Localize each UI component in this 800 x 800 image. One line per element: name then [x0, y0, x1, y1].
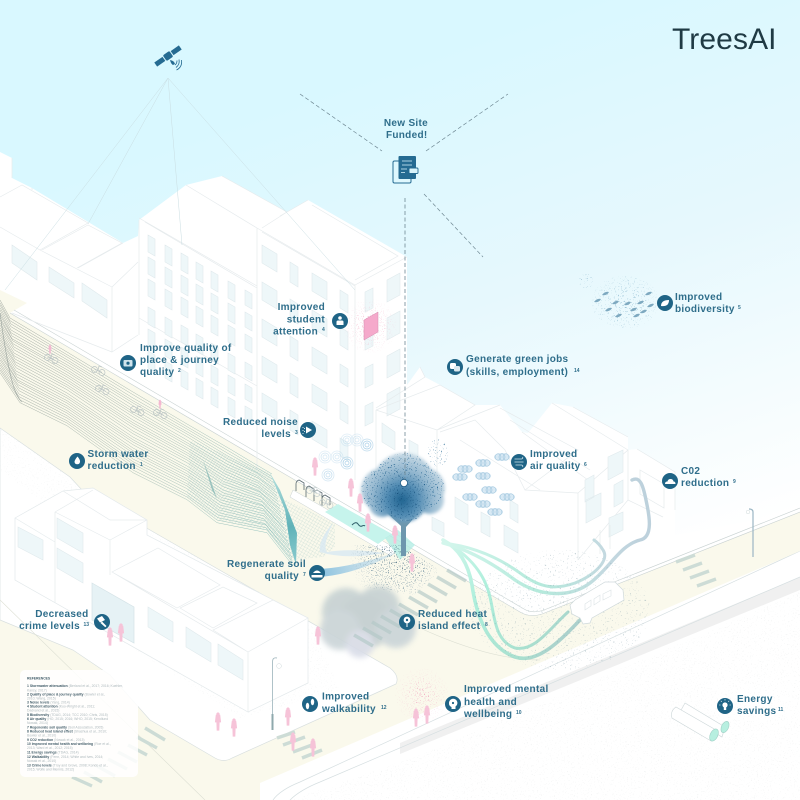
icon: camera	[120, 355, 136, 371]
callout: improved biodiversity: 5	[738, 305, 741, 311]
references list: (Roe et al.,	[94, 742, 111, 746]
particles around flows	[470, 550, 650, 670]
references list: Dadvand et al., 2015)	[27, 708, 59, 712]
car	[570, 582, 624, 624]
callout: improved student attention: Improved	[278, 302, 325, 313]
tree marker	[400, 479, 408, 487]
callout: reduced noise: 3	[295, 430, 298, 436]
crosswalk: lower left	[72, 728, 165, 786]
callout: improved air quality: air quality	[530, 461, 581, 472]
references list: (Bowler et al.,	[84, 692, 105, 696]
callout: improved air quality: 6	[584, 462, 587, 468]
cream streets	[0, 290, 800, 800]
references list: 2013; Ward et al., 2012; 2015)	[27, 746, 73, 750]
callout: improved student attention	[273, 302, 348, 338]
callout: co2 reduction: reduction	[681, 478, 729, 489]
references list: (Shashua et al., 2010;	[74, 730, 107, 734]
student window highlight	[364, 312, 378, 340]
callout: improved student attention: attention	[273, 326, 318, 338]
icon: tree temperature	[399, 614, 415, 630]
icon: satellite	[154, 45, 182, 70]
planter strip and bicycle racks	[290, 480, 415, 560]
callout: improved air quality: Improved	[530, 449, 577, 460]
callout: decreased crime: Decreased	[35, 609, 88, 620]
satellite sight lines	[5, 78, 355, 290]
callout: reduced heat island: island effect	[418, 621, 481, 632]
callout: improved mental health	[445, 684, 549, 720]
references list: (TDAG, 2014)	[58, 750, 79, 754]
pipes	[672, 703, 731, 742]
callout: storm water: reduction	[88, 461, 136, 472]
callout: reduced noise: levels	[261, 429, 291, 440]
icon: speaker	[300, 422, 316, 438]
tree crown	[361, 453, 445, 522]
building: left terrace	[0, 158, 138, 352]
callout: energy savings: Energy	[737, 694, 773, 705]
callout: storm water: Storm water	[88, 449, 149, 460]
callout: regenerate soil: 7	[303, 572, 306, 578]
biodiversity particles and leaves	[579, 274, 659, 328]
callout: regenerate soil: Regenerate soil	[227, 559, 306, 570]
callout: regenerate soil: quality	[265, 571, 299, 582]
callout: improved walkability: Improved	[322, 692, 369, 702]
callout: generate green jobs: Generate green jobs	[466, 354, 569, 365]
chart: storm water ribbon	[0, 300, 385, 566]
particles: pink near student window	[343, 299, 397, 353]
callout: improved mental health: wellbeing	[463, 709, 512, 720]
references list: 10 Improved mental health and wellbeing	[27, 742, 93, 746]
building: row houses	[376, 367, 675, 560]
callout: regenerate soil	[227, 559, 325, 582]
dashed line to tree	[404, 198, 406, 483]
callout: decreased crime: 13	[84, 622, 89, 628]
icon: gavel	[94, 614, 110, 630]
callout: energy savings	[717, 694, 784, 717]
references list: Nowak, 2014)	[27, 721, 48, 725]
callout: improved mental health: Improved mental	[464, 684, 549, 695]
callout: improve quality of place: quality	[140, 367, 174, 378]
callout: improved mental health: health and	[464, 697, 517, 708]
references list: 4 Student attention	[27, 704, 58, 708]
tree trunk	[387, 505, 420, 556]
cyclists	[44, 345, 167, 418]
callout: energy savings: savings	[737, 706, 776, 717]
street lamp: right	[746, 509, 753, 557]
callout: improved air quality	[511, 449, 587, 472]
callout: reduced heat island: Reduced heat	[418, 609, 488, 620]
callout: reduced heat island: 8	[485, 622, 488, 628]
label: new site funded: Funded!	[386, 130, 428, 141]
references list: (Troy and Grove, 2008; Kondo et al.,	[53, 764, 108, 768]
callout: storm water: 1	[140, 462, 143, 468]
background sky	[0, 0, 800, 620]
references list: 13 Crime levels	[27, 764, 52, 768]
street lamp: left	[272, 658, 281, 730]
icon: footprints	[302, 696, 318, 712]
callout: improve quality of place: 2	[178, 368, 181, 374]
callout: improved mental health: 10	[516, 710, 522, 716]
references list: Nowak et al., 2010)	[27, 759, 56, 763]
callout: improve quality of place: Improve quality of	[140, 343, 232, 354]
callout: storm water	[69, 449, 149, 472]
icon: soil	[309, 565, 325, 581]
callout: energy savings: 11	[778, 707, 784, 713]
building: tall tower	[139, 176, 407, 480]
ground plot: lower right white field	[260, 551, 800, 800]
callout: decreased crime	[19, 609, 110, 632]
icon: air	[511, 454, 527, 470]
callout: improve quality of place	[120, 343, 232, 378]
callout: improved biodiversity	[657, 292, 741, 315]
tree	[361, 453, 445, 556]
particles: near house	[428, 439, 448, 467]
icon: funding document	[393, 156, 418, 183]
references list: (TDAG, 2014; TCC 2010; Chris, 2015)	[50, 713, 108, 717]
pedestrians	[107, 457, 430, 757]
heat island shadow	[320, 586, 416, 658]
callout: generate green jobs	[447, 354, 580, 378]
callout: co2 reduction: C02	[681, 466, 700, 477]
air molecules	[452, 453, 515, 516]
callout: reduced heat island	[399, 609, 488, 632]
icon: head	[445, 696, 461, 712]
crosswalk: lower middle	[277, 732, 322, 758]
label: new site funded: New Site	[384, 118, 428, 129]
references list: (Yang, 2014)	[50, 700, 70, 704]
references list: 2015; Wolfe and Mennis, 2012)	[27, 768, 74, 772]
callout: improve quality of place: place & journey	[140, 355, 219, 366]
icon: cloud	[662, 473, 678, 489]
lower white plot	[0, 428, 397, 760]
references list: 8 Reduced heat island effect	[27, 730, 74, 734]
icon: leaf	[657, 295, 673, 311]
references list: 3 Noise levels	[27, 700, 50, 704]
references heading: REFERENCES	[27, 676, 51, 680]
callout: improved student attention: 4	[322, 327, 325, 333]
references list: 5 Biodiversity	[27, 713, 49, 717]
references list: (Berland et al., 2017; 2016; Kuehler,	[69, 684, 123, 688]
references list: 1 Stormwater attenuation	[27, 684, 68, 688]
crosswalk stripes	[354, 570, 466, 646]
noise rings	[319, 434, 373, 481]
callout: reduced noise: Reduced noise	[223, 417, 298, 428]
particles: tree roots	[345, 545, 440, 595]
icon: water drop	[69, 453, 85, 469]
particles: pink mental health	[395, 668, 449, 722]
air flows	[443, 479, 649, 658]
references list: Bowler et al., 2010)	[27, 734, 56, 738]
callout: decreased crime: crime levels	[19, 621, 80, 632]
crosswalk: right	[676, 555, 716, 586]
references list: 2010; Wang, 2015)	[27, 696, 56, 700]
callout: improved walkability: 12	[381, 705, 387, 711]
references list: 6 Air quality	[27, 717, 46, 721]
references list: 9 CO2 reduction	[27, 738, 53, 742]
callout: improved walkability: walkability	[321, 704, 376, 715]
references list: 12 Walkability	[27, 755, 49, 759]
building: lower block	[15, 488, 308, 712]
references list: 7 Regenerate soil quality	[27, 726, 67, 730]
dashed lines from funded site	[300, 94, 508, 257]
callout: reduced noise	[223, 417, 316, 440]
callout: improved biodiversity: biodiversity	[675, 304, 735, 315]
references list: (HO, 2015; 2016; WHO, 2015; Kendlund	[47, 717, 108, 721]
references list: (Nowak et al., 2013)	[54, 738, 84, 742]
callout: improved walkability	[302, 692, 387, 715]
panel: references	[20, 670, 138, 777]
pavement edge lines	[10, 310, 800, 616]
callout: improved biodiversity: Improved	[675, 292, 722, 303]
callout: co2 reduction: 9	[733, 479, 736, 485]
callout: improved student attention: student	[287, 314, 325, 326]
references list: Kansy, 2017)	[27, 688, 47, 692]
icon: light bulb	[717, 698, 733, 714]
references list: (Kuo-Wright et al., 2011;	[59, 704, 95, 708]
icon: student	[332, 313, 348, 329]
references list: (Soil Association, 2005)	[68, 726, 103, 730]
references list: 2 Quality of place & journey quality	[27, 692, 84, 696]
callout: generate green jobs: 14	[574, 368, 580, 374]
blue soil ribbon	[318, 551, 400, 577]
references list: 11 Energy savings	[27, 750, 57, 754]
road curve line	[0, 600, 540, 800]
icon: people cards	[447, 359, 463, 375]
upper white city block	[0, 152, 800, 640]
callout: generate green jobs: (skills, employment)	[466, 367, 568, 378]
references list: (Fenn, 2014; White and Ives, 2014;	[50, 755, 103, 759]
callout: co2 reduction	[662, 466, 736, 489]
logo: TreesAI: TreesAI	[672, 23, 777, 56]
